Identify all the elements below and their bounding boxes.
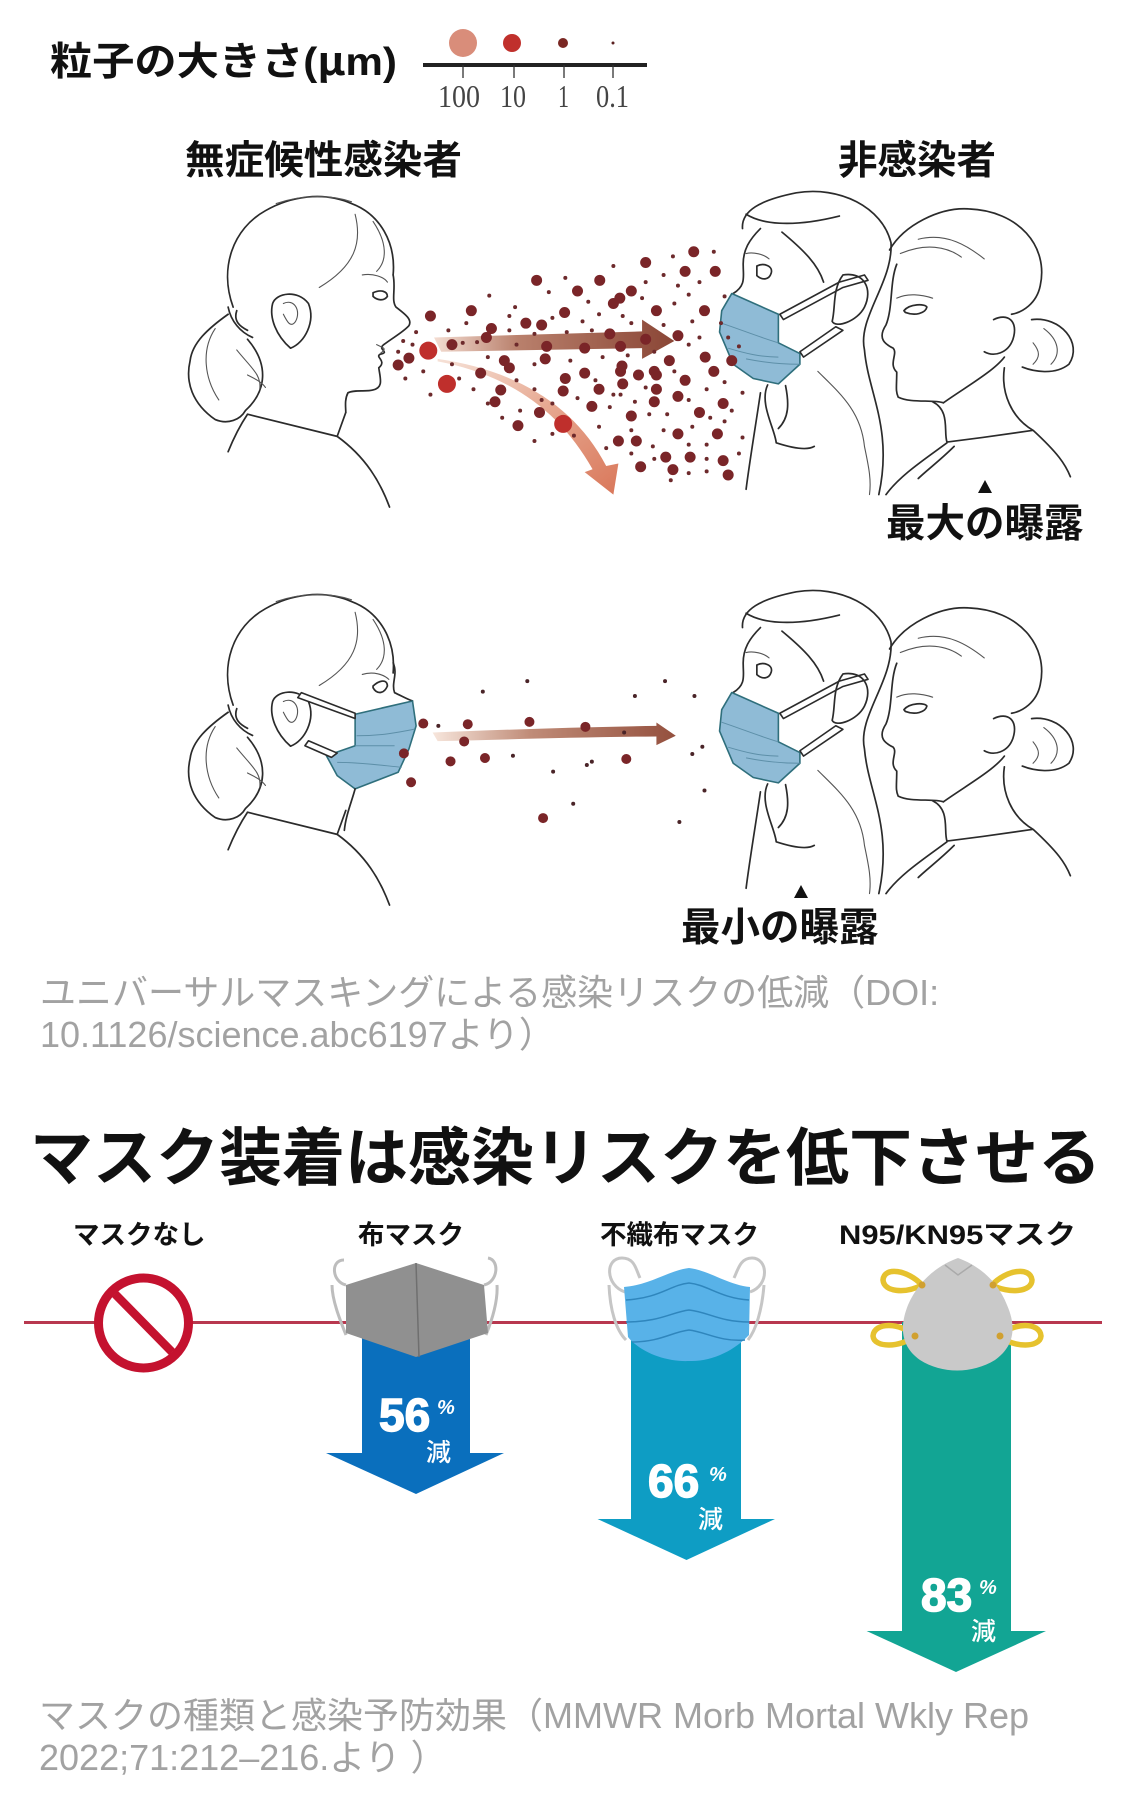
column labels: マスクなし xyxy=(73,1220,206,1250)
column labels: 不織布マスク xyxy=(600,1220,759,1250)
bar: cloth mask 56 percent: 56 xyxy=(379,1389,430,1441)
bar: non-woven mask 66 percent: 減 xyxy=(698,1506,723,1534)
illustration: no mask scenario xyxy=(189,191,1073,507)
masked pair on the right, high exposure xyxy=(720,191,1073,495)
caption: universal masking source: ユニバーサルマスキングによる感染リスクの低減（DOI: xyxy=(40,972,939,1013)
sparse particles xyxy=(404,681,704,822)
exposure marker: maximum: 最大の曝露 xyxy=(886,502,1084,546)
column labels: 布マスク xyxy=(358,1220,464,1250)
bar: non-woven mask 66 percent: 66 xyxy=(648,1455,699,1507)
legend scale labels: 100 xyxy=(438,78,480,114)
title: masks reduce infection risk: マスク装着は感染リスクを低下させる xyxy=(30,1124,1101,1194)
bar: N95 mask 83 percent: 減 xyxy=(971,1618,996,1646)
exposure marker: minimum: 最小の曝露 xyxy=(681,906,878,950)
legend scale labels xyxy=(438,78,629,114)
heading: asymptomatic infected person: 無症候性感染者 xyxy=(185,139,462,183)
legend title: 粒子の大きさ( μm) xyxy=(50,31,397,87)
bar: cloth mask 56 percent: 減 xyxy=(426,1439,451,1467)
icon: N95 mask xyxy=(873,1258,1041,1370)
caption: mask effectiveness source: マスクの種類と感染予防効果（MMWR Morb Mortal Wkly Rep xyxy=(39,1695,1029,1736)
reduced particle arrow xyxy=(433,723,676,745)
bar: cloth mask 56 percent xyxy=(326,1322,504,1494)
airborne particle arrow xyxy=(434,320,674,359)
bar: non-woven mask 66 percent: % xyxy=(709,1464,727,1486)
caption: universal masking source: 10.1126/science.abc6197より） xyxy=(40,1014,555,1055)
falling droplet arrow xyxy=(438,359,618,495)
heading: uninfected person: 非感染者 xyxy=(838,139,996,183)
legend scale labels: 1 xyxy=(558,78,569,114)
icon: cloth mask xyxy=(332,1258,497,1357)
column labels xyxy=(73,1220,1076,1250)
legend scale labels: 0.1 xyxy=(596,78,629,114)
masked speaker head xyxy=(189,595,416,905)
masked pair on the right, low exposure xyxy=(720,590,1073,894)
bar: N95 mask 83 percent xyxy=(867,1322,1046,1672)
caption: mask effectiveness source: 2022;71:212–216.より ） xyxy=(39,1737,447,1778)
particle cloud xyxy=(398,252,743,480)
exposure marker: minimum xyxy=(681,885,878,950)
unmasked speaker head xyxy=(189,197,410,507)
legend scale axis xyxy=(423,63,647,78)
icon: no mask prohibition sign xyxy=(98,1278,188,1368)
legend scale labels: 10 xyxy=(500,78,526,114)
bar: N95 mask 83 percent: 83 xyxy=(921,1569,972,1621)
column labels: N95/KN95マスク xyxy=(839,1220,1076,1250)
baseline red line xyxy=(24,1321,1102,1324)
illustration: masked scenario xyxy=(189,590,1073,905)
bar: non-woven mask 66 percent xyxy=(598,1322,775,1560)
icon: non-woven mask xyxy=(609,1258,764,1361)
legend: particle size scale xyxy=(50,29,647,114)
bar: N95 mask 83 percent: % xyxy=(979,1577,997,1599)
exposure marker: maximum xyxy=(886,480,1084,546)
bar: cloth mask 56 percent: % xyxy=(437,1397,455,1419)
legend particle dots xyxy=(449,29,614,57)
